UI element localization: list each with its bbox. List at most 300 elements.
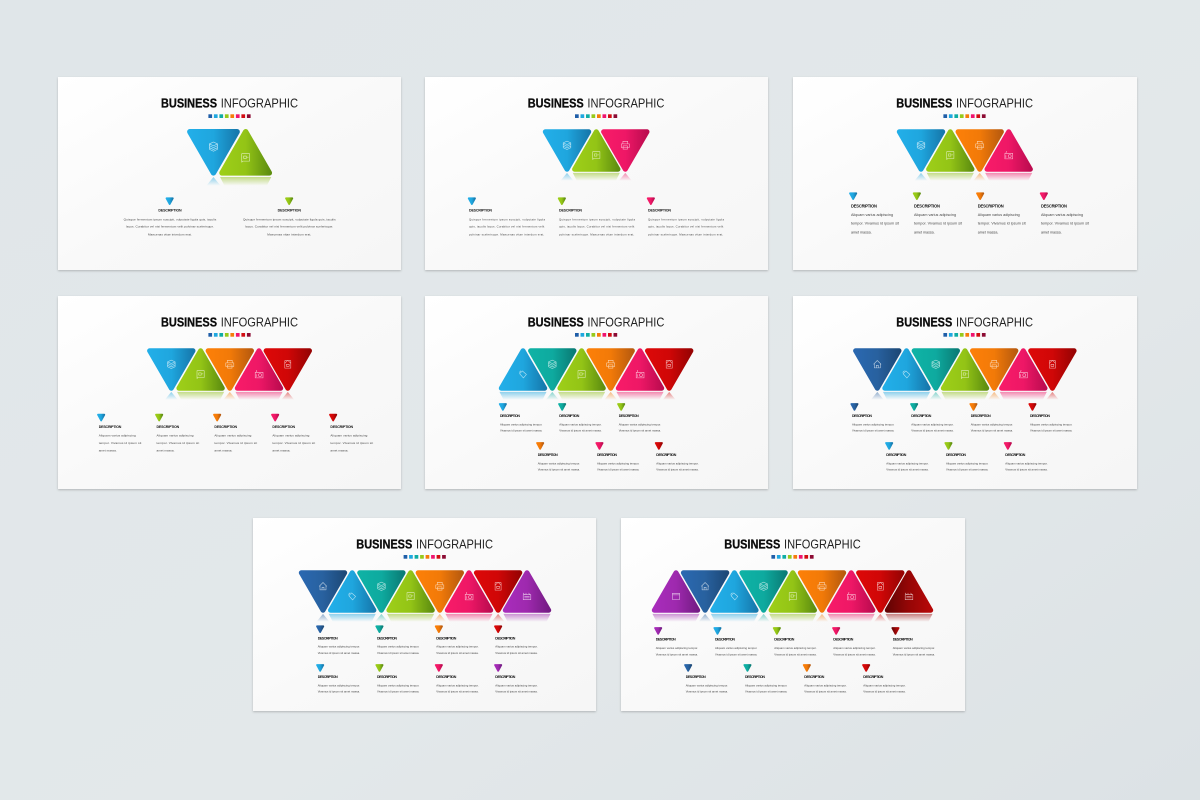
text block	[597, 453, 640, 472]
marker	[850, 193, 856, 199]
text block: Vivamus id ipsum sit amet massa.	[715, 652, 758, 656]
text block: amet massa.	[214, 448, 233, 452]
triangle: pink	[985, 132, 1032, 181]
text block: Vivamus id ipsum sit amet massa.	[500, 429, 543, 433]
triangle: green	[558, 351, 605, 400]
text block: Quisque fermentum ipsum suscipit, vulputate ligula	[469, 217, 545, 221]
triangle: red	[648, 351, 691, 400]
text block: Aliquam varius adipiscing tempor.	[833, 646, 876, 650]
text block: Vivamus id ipsum sit amet massa.	[318, 690, 360, 694]
triangle: orange	[208, 351, 252, 400]
text block: tempor. Vivamus id ipsum sit	[330, 441, 373, 445]
text block: Aliquam varius adipiscing	[978, 213, 1020, 217]
triangle: orange	[972, 351, 1016, 400]
text block: Aliquam varius adipiscing	[330, 434, 368, 438]
text block	[495, 636, 538, 655]
text block: Aliquam varius adipiscing tempor.	[745, 683, 788, 687]
marker	[317, 626, 323, 632]
text block	[559, 414, 602, 433]
text block: amet massa.	[1041, 230, 1062, 234]
text block: amet massa.	[156, 448, 175, 452]
text block	[1041, 203, 1089, 234]
text block: tempor. Vivamus id ipsum sit	[99, 441, 142, 445]
marker	[376, 665, 383, 671]
text block	[715, 638, 758, 656]
text block: Vivamus id ipsum sit amet massa.	[1005, 468, 1048, 472]
marker	[1029, 404, 1036, 410]
text block: DESCRIPTION	[914, 203, 940, 208]
text block: DESCRIPTION	[911, 414, 932, 418]
text block: Aliquam varius adipiscing tempor.	[971, 422, 1013, 426]
marker	[744, 665, 751, 671]
marker	[970, 404, 977, 410]
text block: Vivamus id ipsum sit amet massa.	[911, 429, 954, 433]
triangle: teal	[742, 573, 785, 622]
title	[896, 97, 1033, 111]
text block: amet massa.	[914, 230, 935, 234]
text block: DESCRIPTION	[495, 675, 516, 679]
triangle: orange	[418, 573, 462, 622]
text block: DESCRIPTION	[318, 675, 338, 679]
title: BUSINESS	[528, 316, 584, 330]
text block: DESCRIPTION	[971, 414, 991, 418]
colour squares	[771, 555, 814, 559]
text block	[377, 636, 420, 655]
text block: Maecenas vitae interdum erat.	[148, 232, 192, 236]
triangle: dark blue	[683, 573, 727, 622]
triangle: dark blue	[856, 351, 899, 400]
marker	[914, 193, 920, 199]
marker	[656, 443, 662, 449]
text block: Aliquam varius adipiscing tempor.	[804, 683, 847, 687]
text block: Vivamus id ipsum sit amet massa.	[852, 429, 895, 433]
marker	[500, 404, 506, 410]
text block: Aliquam varius adipiscing tempor.	[656, 646, 698, 650]
text block: Vivamus id ipsum sit amet massa.	[656, 468, 699, 472]
triangle: blue	[545, 132, 589, 181]
text block: DESCRIPTION	[1030, 414, 1050, 418]
text block: DESCRIPTION	[1041, 203, 1067, 208]
triangle: red	[1031, 351, 1074, 400]
triangle: orange	[589, 351, 632, 400]
text block: Aliquam varius adipiscing tempor.	[436, 683, 479, 687]
text block: DESCRIPTION	[946, 453, 966, 457]
text block	[1030, 414, 1073, 433]
title: BUSINESS	[356, 538, 412, 552]
text block: Aliquam varius adipiscing tempor.	[886, 461, 929, 465]
triangle: purple	[504, 573, 550, 622]
text block	[318, 675, 360, 694]
text block: Vivamus id ipsum sit amet massa.	[1030, 429, 1073, 433]
text block: Aliquam varius adipiscing tempor.	[715, 646, 758, 650]
text block	[833, 638, 876, 656]
text block: DESCRIPTION	[852, 414, 872, 418]
text block: Vivamus id ipsum sit amet massa.	[745, 690, 788, 694]
marker	[655, 628, 661, 634]
text block: DESCRIPTION	[538, 453, 558, 457]
text block	[745, 675, 788, 694]
triangle: pink	[616, 351, 664, 400]
panel: six triangles	[425, 296, 768, 489]
marker	[330, 415, 336, 420]
marker	[272, 415, 278, 420]
marker	[376, 626, 383, 632]
title: INFOGRAPHIC	[221, 316, 298, 330]
text block: Aliquam varius adipiscing tempor.	[559, 422, 602, 426]
text block: Aliquam varius adipiscing tempor.	[500, 422, 543, 426]
text block	[971, 414, 1013, 433]
text block: amet massa.	[99, 448, 117, 452]
text block	[686, 675, 728, 694]
panel: two triangles	[58, 77, 401, 270]
text block	[318, 636, 360, 655]
marker	[618, 404, 624, 410]
text block: DESCRIPTION	[774, 638, 795, 642]
text block: lacus. Curabitur vel nisi fermentum velit pulvinar scelerisque.	[245, 225, 333, 229]
text block: DESCRIPTION	[99, 425, 122, 429]
text block: Quisque fermentum ipsum suscipit, vulputate ligula quis, iaculis	[124, 217, 217, 221]
title: BUSINESS	[528, 97, 584, 111]
text block: quis, iaculis lacus. Curabitur vel nisi fermentum velit	[469, 225, 545, 229]
text block: Maecenas vitae interdum erat.	[267, 232, 311, 236]
text block: DESCRIPTION	[833, 638, 854, 642]
text block: Aliquam varius adipiscing tempor.	[656, 461, 699, 465]
triangle: green	[177, 351, 224, 400]
text block: Quisque fermentum ipsum suscipit, vulputate ligula	[559, 217, 635, 221]
text block: DESCRIPTION	[278, 209, 301, 213]
text block: DESCRIPTION	[686, 675, 706, 679]
text block	[648, 209, 724, 236]
text block: tempor. Vivamus id ipsum sit	[851, 222, 899, 226]
text block: Aliquam varius adipiscing tempor.	[377, 683, 420, 687]
text block: Vivamus id ipsum sit amet massa.	[318, 651, 360, 655]
triangle: green	[220, 132, 271, 186]
triangle: blue	[329, 573, 376, 622]
triangle: green	[769, 573, 816, 622]
text block: tempor. Vivamus id ipsum sit	[214, 441, 257, 445]
text block	[538, 453, 580, 472]
text block: DESCRIPTION	[272, 425, 295, 429]
text block	[214, 425, 257, 452]
colour squares	[404, 555, 446, 559]
text block: DESCRIPTION	[436, 636, 457, 640]
triangle: pink	[236, 351, 282, 400]
text block: DESCRIPTION	[318, 636, 338, 640]
text block: tempor. Vivamus id ipsum sit	[978, 222, 1026, 226]
text block: Aliquam varius adipiscing tempor.	[893, 646, 935, 650]
text block	[863, 675, 906, 694]
triangle: blue	[500, 351, 546, 400]
title	[528, 316, 664, 330]
title: INFOGRAPHIC	[956, 316, 1033, 330]
marker	[685, 665, 691, 671]
colour squares	[208, 333, 251, 337]
text block: Aliquam varius adipiscing	[156, 434, 194, 438]
text block: Vivamus id ipsum sit amet massa.	[971, 429, 1013, 433]
text block: Aliquam varius adipiscing	[1041, 213, 1083, 217]
text block: Vivamus id ipsum sit amet massa.	[495, 690, 538, 694]
text block: Aliquam varius adipiscing tempor.	[436, 645, 479, 649]
text block: pulvinar scelerisque. Maecenas vitae interdum erat.	[469, 232, 545, 236]
marker	[714, 628, 721, 634]
marker	[596, 443, 603, 449]
text block: DESCRIPTION	[156, 425, 180, 429]
text block: Vivamus id ipsum sit amet massa.	[436, 651, 479, 655]
marker	[436, 665, 442, 671]
marker	[892, 628, 899, 634]
text block: DESCRIPTION	[656, 638, 676, 642]
triangle: green	[942, 351, 988, 400]
triangle: teal	[914, 351, 958, 400]
marker	[911, 404, 917, 410]
triangle: pink	[1000, 351, 1047, 400]
text block: DESCRIPTION	[330, 425, 353, 429]
text block: DESCRIPTION	[619, 414, 639, 418]
text block	[330, 425, 373, 452]
triangle: pink	[446, 573, 492, 622]
triangle: pink	[604, 132, 647, 181]
triangle: green	[927, 132, 974, 181]
text block: DESCRIPTION	[656, 453, 677, 457]
text block: DESCRIPTION	[559, 209, 582, 213]
title: INFOGRAPHIC	[221, 97, 298, 111]
text block: amet massa.	[330, 448, 349, 452]
text block: Aliquam varius adipiscing tempor.	[774, 646, 817, 650]
text block: Aliquam varius adipiscing	[99, 434, 136, 438]
text block	[377, 675, 420, 694]
text block: lacus. Curabitur vel nisi fermentum velit pulvinar scelerisque.	[126, 225, 214, 229]
text block: DESCRIPTION	[1005, 453, 1026, 457]
text block: amet massa.	[978, 230, 998, 234]
colour squares	[575, 114, 617, 118]
marker	[317, 665, 323, 671]
marker	[537, 443, 543, 449]
title	[356, 538, 493, 552]
text block: Vivamus id ipsum sit amet massa.	[538, 468, 580, 472]
marker	[648, 198, 654, 204]
panel: seven triangles	[793, 296, 1137, 489]
colour squares	[575, 333, 617, 337]
text block: Aliquam varius adipiscing tempor.	[686, 683, 728, 687]
text block	[436, 636, 479, 655]
triangle: maroon	[886, 573, 932, 622]
text block: tempor. Vivamus id ipsum sit	[914, 222, 962, 226]
text block	[495, 675, 538, 694]
title: BUSINESS	[724, 538, 780, 552]
marker	[833, 628, 839, 634]
marker	[1005, 443, 1011, 449]
triangle: red	[476, 573, 520, 622]
marker	[774, 628, 780, 634]
colour squares	[943, 114, 986, 118]
text block: Aliquam varius adipiscing	[214, 434, 252, 438]
marker	[559, 404, 565, 410]
text block: DESCRIPTION	[804, 675, 825, 679]
text block	[156, 425, 199, 452]
text block: Vivamus id ipsum sit amet massa.	[436, 690, 479, 694]
title: INFOGRAPHIC	[416, 538, 493, 552]
marker	[559, 198, 565, 204]
text block: tempor. Vivamus id ipsum sit	[272, 441, 315, 445]
text block: DESCRIPTION	[863, 675, 884, 679]
text block: Vivamus id ipsum sit amet massa.	[893, 652, 935, 656]
triangle: orange	[800, 573, 844, 622]
triangle: teal	[360, 573, 403, 622]
marker	[214, 415, 220, 420]
text block: Vivamus id ipsum sit amet massa.	[559, 429, 602, 433]
triangle: orange	[958, 132, 1001, 181]
text block: Aliquam varius adipiscing tempor.	[538, 461, 580, 465]
marker	[495, 626, 501, 632]
text block: DESCRIPTION	[377, 636, 397, 640]
triangle: blue	[190, 132, 237, 186]
text block: Vivamus id ipsum sit amet massa.	[946, 468, 989, 472]
triangle: teal	[531, 351, 574, 400]
panel: three triangles	[425, 77, 768, 270]
text block: DESCRIPTION	[745, 675, 765, 679]
text block	[911, 414, 954, 433]
text block	[886, 453, 929, 472]
text block: Aliquam varius adipiscing tempor.	[377, 645, 420, 649]
title	[161, 97, 298, 111]
text block: Aliquam varius adipiscing tempor.	[318, 645, 360, 649]
triangle: green	[573, 132, 620, 181]
text block: DESCRIPTION	[469, 209, 492, 213]
text block	[436, 675, 479, 694]
text block: DESCRIPTION	[715, 638, 735, 642]
text block: Vivamus id ipsum sit amet massa.	[886, 468, 929, 472]
text block: Aliquam varius adipiscing	[914, 213, 956, 217]
text block: pulvinar scelerisque. Maecenas vitae interdum erat.	[559, 232, 635, 236]
text block	[804, 675, 847, 694]
marker	[98, 415, 104, 420]
title: INFOGRAPHIC	[784, 538, 861, 552]
marker	[469, 198, 475, 204]
text block: Aliquam varius adipiscing	[851, 213, 893, 217]
title: INFOGRAPHIC	[956, 97, 1033, 111]
title: BUSINESS	[161, 316, 217, 330]
text block: Aliquam varius adipiscing tempor.	[852, 422, 895, 426]
text block: Aliquam varius adipiscing tempor.	[1030, 422, 1073, 426]
title	[724, 538, 861, 552]
text block: DESCRIPTION	[886, 453, 907, 457]
panel: four triangles	[793, 77, 1137, 270]
text block: DESCRIPTION	[500, 414, 520, 418]
marker	[1041, 193, 1047, 199]
text block: Aliquam varius adipiscing tempor.	[619, 422, 661, 426]
marker	[495, 665, 501, 671]
text block: DESCRIPTION	[648, 209, 671, 213]
marker	[156, 415, 162, 420]
title: BUSINESS	[161, 97, 217, 111]
marker	[286, 198, 292, 204]
triangle: blue	[899, 132, 943, 181]
text block: quis, iaculis lacus. Curabitur vel nisi fermentum velit	[559, 225, 635, 229]
text block	[272, 425, 315, 452]
triangle: blue	[150, 351, 193, 400]
title	[161, 316, 298, 330]
text block: DESCRIPTION	[978, 203, 1004, 208]
triangle: pink	[828, 573, 875, 622]
text block: DESCRIPTION	[893, 638, 913, 642]
text block: DESCRIPTION	[158, 209, 182, 213]
text block: Aliquam varius adipiscing tempor.	[946, 461, 989, 465]
text block: Vivamus id ipsum sit amet massa.	[804, 690, 847, 694]
text block: DESCRIPTION	[436, 675, 457, 679]
text block: Vivamus id ipsum sit amet massa.	[377, 651, 420, 655]
text block: Aliquam varius adipiscing	[272, 434, 310, 438]
text block: Vivamus id ipsum sit amet massa.	[377, 690, 420, 694]
text block: DESCRIPTION	[597, 453, 617, 457]
text block	[774, 638, 817, 656]
panel: five triangles	[58, 296, 401, 489]
text block	[124, 209, 217, 236]
triangle: dark blue	[301, 573, 345, 622]
text block: DESCRIPTION	[214, 425, 237, 429]
text block	[500, 414, 543, 433]
text block: Vivamus id ipsum sit amet massa.	[774, 652, 817, 656]
text block: Vivamus id ipsum sit amet massa.	[863, 690, 906, 694]
title: INFOGRAPHIC	[587, 97, 664, 111]
panel: nine triangles	[621, 518, 965, 711]
triangle: purple	[652, 573, 700, 622]
text block: amet massa.	[851, 230, 872, 234]
text block	[893, 638, 935, 656]
text block: amet massa.	[272, 448, 291, 452]
text block	[851, 203, 899, 234]
text block: tempor. Vivamus id ipsum sit	[1041, 222, 1089, 226]
text block: DESCRIPTION	[495, 636, 516, 640]
text block	[619, 414, 661, 433]
panel: eight triangles	[253, 518, 596, 711]
text block: Aliquam varius adipiscing tempor.	[495, 683, 538, 687]
text block	[1005, 453, 1048, 472]
colour squares	[208, 114, 251, 118]
text block: Vivamus id ipsum sit amet massa.	[619, 429, 661, 433]
text block	[656, 453, 699, 472]
text block	[656, 638, 698, 656]
triangle: blue	[883, 351, 930, 400]
marker	[886, 443, 892, 449]
text block: DESCRIPTION	[851, 203, 877, 208]
marker	[977, 193, 983, 199]
text block	[99, 425, 142, 452]
marker	[804, 665, 810, 671]
title	[528, 97, 664, 111]
text block: Quisque fermentum ipsum suscipit, vulputate ligula quis, iaculis	[243, 217, 336, 221]
colour squares	[943, 333, 986, 337]
text block: Aliquam varius adipiscing tempor.	[1005, 461, 1048, 465]
text block: Quisque fermentum ipsum suscipit, vulputate ligula	[648, 217, 724, 221]
text block	[978, 203, 1026, 234]
text block: tempor. Vivamus id ipsum sit	[156, 441, 199, 445]
title: INFOGRAPHIC	[587, 316, 664, 330]
text block: DESCRIPTION	[559, 414, 580, 418]
text block: Aliquam varius adipiscing tempor.	[597, 461, 640, 465]
marker	[851, 404, 858, 410]
text block	[946, 453, 989, 472]
text block: Vivamus id ipsum sit amet massa.	[686, 690, 728, 694]
triangle: blue	[711, 573, 758, 622]
text block: DESCRIPTION	[377, 675, 397, 679]
text block	[852, 414, 895, 433]
text block: quis, iaculis lacus. Curabitur vel nisi fermentum velit	[648, 225, 724, 229]
text block: Vivamus id ipsum sit amet massa.	[597, 468, 640, 472]
text block: Vivamus id ipsum sit amet massa.	[833, 652, 876, 656]
text block: Vivamus id ipsum sit amet massa.	[656, 652, 698, 656]
marker	[436, 626, 442, 632]
text block: Aliquam varius adipiscing tempor.	[863, 683, 906, 687]
